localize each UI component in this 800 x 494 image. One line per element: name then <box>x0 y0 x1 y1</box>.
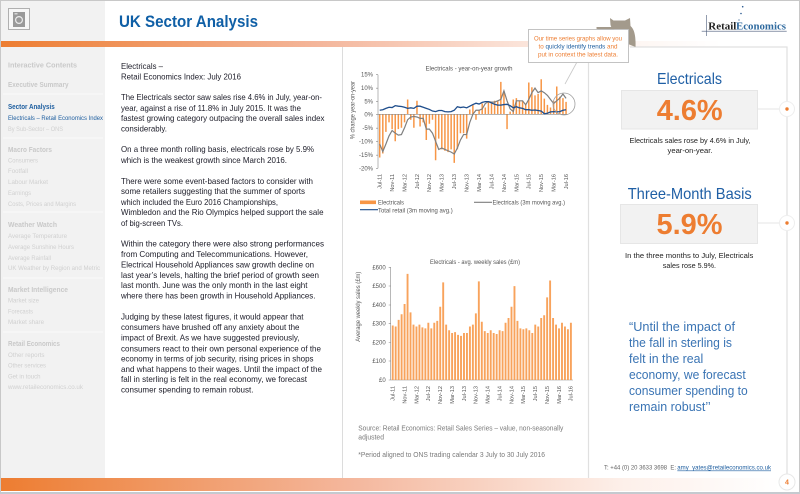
paragraph 5: consumers react to their own personal experience of the <box>121 344 321 354</box>
nav: retail economics: Get in touch <box>8 374 41 380</box>
y axis labels <box>372 265 386 384</box>
axes <box>389 267 573 380</box>
title: UK Sector Analysis <box>119 12 258 31</box>
nav: retail economics <box>7 339 84 391</box>
y axis labels: £400 <box>372 303 386 309</box>
paragraph 4: Within the category there were also strong performances <box>121 238 324 248</box>
paragraph 1: fastest growing category outpacing the overall sales index <box>121 113 325 123</box>
logo: Retail Economics: Retail <box>708 21 736 32</box>
nav: macro factors: Macro Factors <box>8 145 52 154</box>
x axis labels: Mar-15 <box>514 174 520 192</box>
y axis title: Average weekly sales (£m) <box>356 272 362 342</box>
source notes: *Period aligned to ONS trading calendar 3 July to 30 July 2016 <box>358 450 545 459</box>
y axis labels: -20% <box>359 166 374 172</box>
stat caption: year-on-year. <box>668 148 713 155</box>
x axis labels: Mar-15 <box>521 386 527 404</box>
stat value: 5.9% <box>656 209 723 241</box>
paragraph 4: last year’s levels, halting the brief period of growth seen <box>121 270 319 280</box>
stat caption <box>630 138 751 155</box>
line: total retail 3m moving average <box>380 102 566 114</box>
nav: market intelligence: Market share <box>8 319 44 326</box>
article heading: Electricals – <box>121 61 163 71</box>
y axis title: % change year-on-year <box>350 81 356 139</box>
x axis labels: Mar-14 <box>477 174 483 192</box>
nav: macro factors <box>8 145 76 208</box>
paragraph 2: On a three month rolling basis, electricals rose by 5.9% <box>121 144 315 154</box>
paragraph 5: economy in terms of job security, rising prices in shops <box>121 354 314 364</box>
y axis labels: £200 <box>372 340 386 346</box>
stat caption: Electricals sales rose by 4.6% in July, <box>630 138 751 145</box>
paragraph 2: which is the weakest growth since March 2016. <box>120 155 287 165</box>
x axis labels: Nov-11 <box>390 174 396 192</box>
paragraph 5: consumers have brushed off any anxiety about the <box>121 322 300 332</box>
x axis labels: Nov-13 <box>464 174 470 192</box>
logo: Retail Economics: Economics <box>736 21 786 32</box>
x axis labels: Nov-14 <box>502 174 508 192</box>
paragraph 4: last month. June was the only month in the last eight <box>121 280 308 290</box>
legend: Electricals (3m moving avg.) <box>492 200 565 206</box>
nav: sector analysis: Sector Analysis <box>8 102 55 111</box>
nav: weather watch: Weather Watch <box>8 220 57 229</box>
y axis labels: £500 <box>372 284 386 290</box>
pull quote <box>629 319 748 414</box>
source notes: Source: Retail Economics: Retail Sales Series – value, non-seasonally <box>358 424 564 432</box>
x axis labels: Nov-15 <box>545 386 551 404</box>
x axis labels: Jul-16 <box>564 174 570 189</box>
nav: sector analysis: By Sub-Sector – ONS <box>8 126 63 133</box>
nav: interactive contents: Interactive Contents <box>8 60 77 70</box>
nav: retail economics: www.retaileconomics.co.uk <box>7 384 84 391</box>
nav: macro factors: Earnings <box>8 190 31 197</box>
nav: retail economics: Other reports <box>8 352 44 359</box>
nav: weather watch: Average Temperature <box>8 233 67 240</box>
x axis labels: Jul-13 <box>452 174 458 189</box>
paragraph 5: and what happens to their wages. Until the impact of the <box>121 364 322 374</box>
y axis labels: £100 <box>372 359 386 365</box>
x axis labels: Nov-12 <box>438 386 444 404</box>
legend: Electricals <box>378 200 404 206</box>
sidebar: navigation <box>3 60 104 391</box>
paragraph 5: consumer spending to remain robust. <box>121 384 254 394</box>
y axis labels: -15% <box>359 153 374 159</box>
nav: macro factors: Labour Market <box>8 179 48 186</box>
paragraph 3: There were some event-based factors to consider with <box>121 176 313 186</box>
nav: retail economics: Retail Economics <box>8 339 60 348</box>
right panel frame <box>588 47 787 478</box>
paragraph 4: from Computing and Telecommunications. However, <box>121 249 308 259</box>
x axis labels: Mar-12 <box>414 386 420 404</box>
bars: electricals growth <box>380 79 566 163</box>
nav: retail economics: Other services <box>8 362 46 370</box>
y axis labels: -5% <box>362 126 374 132</box>
x axis labels <box>378 174 570 192</box>
x axis labels: Nov-12 <box>427 174 433 192</box>
x axis labels: Nov-11 <box>402 386 408 404</box>
y axis labels: 15% <box>361 73 374 79</box>
y axis labels: £300 <box>372 322 386 328</box>
contact details: amy_yates@retaileconomics.co.uk <box>677 464 772 472</box>
paragraph 4: where there has been growth in Household Appliances. <box>120 290 315 300</box>
page number <box>779 474 795 490</box>
stat heading: Three-Month Basis <box>628 186 752 203</box>
paragraph 1 <box>121 92 325 134</box>
paragraph 3: Wimbledon and the Rio Olympics helped support the sale <box>121 207 324 217</box>
article heading <box>121 61 241 82</box>
axes <box>376 75 378 168</box>
owl mascot <box>596 18 636 47</box>
stat caption: sales rose 5.9%. <box>663 263 716 270</box>
x axis labels: Jul-16 <box>569 386 575 401</box>
stat caption: In the three months to July, Electricals <box>625 253 754 260</box>
x axis labels: Mar-13 <box>440 174 446 192</box>
x axis labels: Jul-14 <box>489 174 495 189</box>
y axis labels: £600 <box>372 265 386 271</box>
paragraph 3: which included the Euro 2016 Championships, <box>120 197 278 207</box>
pull quote: consumer spending to <box>629 383 748 398</box>
x axis labels <box>390 386 575 404</box>
y axis labels: -10% <box>359 140 374 146</box>
y axis labels: £0 <box>379 378 386 384</box>
y axis labels: 5% <box>364 100 374 106</box>
contact details <box>604 464 772 472</box>
panel: three-month stat <box>620 186 794 270</box>
x axis labels: Nov-15 <box>539 174 545 192</box>
x axis labels: Jul-12 <box>426 386 432 401</box>
x axis labels: Jul-15 <box>527 174 533 189</box>
stat value: 4.6% <box>657 95 723 127</box>
nav: macro factors: Costs, Prices and Margins <box>8 201 76 208</box>
nav: macro factors: Footfall <box>8 168 28 175</box>
pull quote: economy, we forecast <box>629 367 746 382</box>
page number: 4 <box>785 480 789 486</box>
pull quote: felt in the real <box>629 351 703 366</box>
paragraph 5: Judging by these latest figures, it would appear that <box>121 312 304 322</box>
nav: macro factors: Consumers <box>8 158 38 164</box>
bars: weekly sales <box>393 274 571 380</box>
x axis labels: Jul-11 <box>378 174 384 189</box>
y axis labels: 10% <box>361 86 374 92</box>
x axis labels: Nov-14 <box>509 386 515 404</box>
nav: weather watch <box>8 220 101 272</box>
legend: Total retail (3m moving avg.) <box>378 208 453 214</box>
paragraph 3: some retailers suggesting that the summer of sports <box>121 186 305 196</box>
logo: Retail Economics <box>702 6 787 36</box>
callout: time series note: to quickly identify trends and <box>538 44 618 50</box>
y axis labels: 0% <box>364 112 374 118</box>
line: electricals 3m moving average <box>380 88 566 154</box>
stat heading: Electricals <box>657 71 722 88</box>
paragraph 5 <box>121 312 322 394</box>
nav: market intelligence: Market Intelligence <box>8 285 68 294</box>
paragraph 3: of big-screen TVs. <box>121 218 183 228</box>
connector dot <box>758 102 794 116</box>
paragraph 1: considerably. <box>121 124 167 134</box>
panel: electricals stat <box>622 71 794 155</box>
nav: sector analysis <box>8 102 104 133</box>
legend <box>360 200 565 214</box>
pull quote: remain robust’’ <box>629 399 711 414</box>
paragraph 3 <box>120 176 324 228</box>
y axis labels <box>359 73 374 172</box>
callout: time series note: put in context the latest data. <box>538 52 618 58</box>
x axis labels: Jul-11 <box>390 386 396 401</box>
paragraph 1: year, against a rise of 11.8% in July 2015. It was the <box>121 103 301 113</box>
paragraph 5: impact of Brexit. As we have suggested previously, <box>121 332 300 342</box>
paragraph 4 <box>120 238 324 300</box>
x axis labels: Mar-16 <box>552 174 558 192</box>
pull quote: the fall in sterling is <box>629 335 732 350</box>
nav: market intelligence: Market size <box>8 298 39 304</box>
highlight circle <box>553 93 575 115</box>
source notes: adjusted <box>358 432 384 442</box>
article heading: Retail Economics Index: July 2016 <box>121 72 241 82</box>
nav: weather watch: Average Rainfall <box>8 255 51 262</box>
nav: market intelligence: Forecasts <box>8 308 33 316</box>
bar chart: average weekly sales <box>356 260 575 404</box>
nav: market intelligence <box>8 285 68 326</box>
paragraph 2 <box>120 144 315 165</box>
footer band <box>1 478 781 491</box>
article text <box>120 61 325 394</box>
x axis labels: Jul-14 <box>497 386 503 401</box>
chart title: Electricals - year-on-year growth <box>426 66 512 72</box>
chart title: Electricals - avg. weekly sales (£m) <box>430 260 520 266</box>
nav: weather watch: UK Weather by Region and Metric <box>8 265 101 272</box>
connector dot <box>758 216 794 230</box>
stat box <box>622 90 758 129</box>
x axis labels: Mar-14 <box>486 386 492 404</box>
x axis labels: Mar-12 <box>402 174 408 192</box>
nav: weather watch: Average Sunshine Hours <box>8 244 74 251</box>
stat caption <box>625 253 754 270</box>
nav: sector analysis: Electricals – Retail Economics Index <box>8 115 104 122</box>
nav: executive summary: Executive Summary <box>8 80 68 89</box>
x axis labels: Jul-12 <box>415 174 421 189</box>
callout: time series note: Our time series graphs allow you <box>534 36 623 42</box>
paragraph 4: Electrical Household Appliances saw growth decline on <box>121 259 314 269</box>
x axis labels: Jul-13 <box>462 386 468 401</box>
x axis labels: Nov-13 <box>474 386 480 404</box>
stat box <box>620 204 758 244</box>
paragraph 5: fall in sterling is felt in the real economy, we forecast <box>121 374 308 384</box>
contact details: T: +44 (0) 20 3633 3698 E: <box>604 464 676 472</box>
icon: washing machine <box>8 8 30 30</box>
pull quote: “Until the impact of <box>629 319 735 334</box>
paragraph 1: The Electricals sector saw sales rise 4.6% in July, year-on- <box>121 92 322 102</box>
source notes <box>358 424 564 459</box>
line and bar chart: year-on-year growth <box>350 66 575 214</box>
callout: time series note <box>528 30 628 84</box>
header band <box>1 41 721 47</box>
x axis labels: Jul-15 <box>533 386 539 401</box>
x axis labels: Mar-13 <box>450 386 456 404</box>
x axis labels: Mar-16 <box>557 386 563 404</box>
